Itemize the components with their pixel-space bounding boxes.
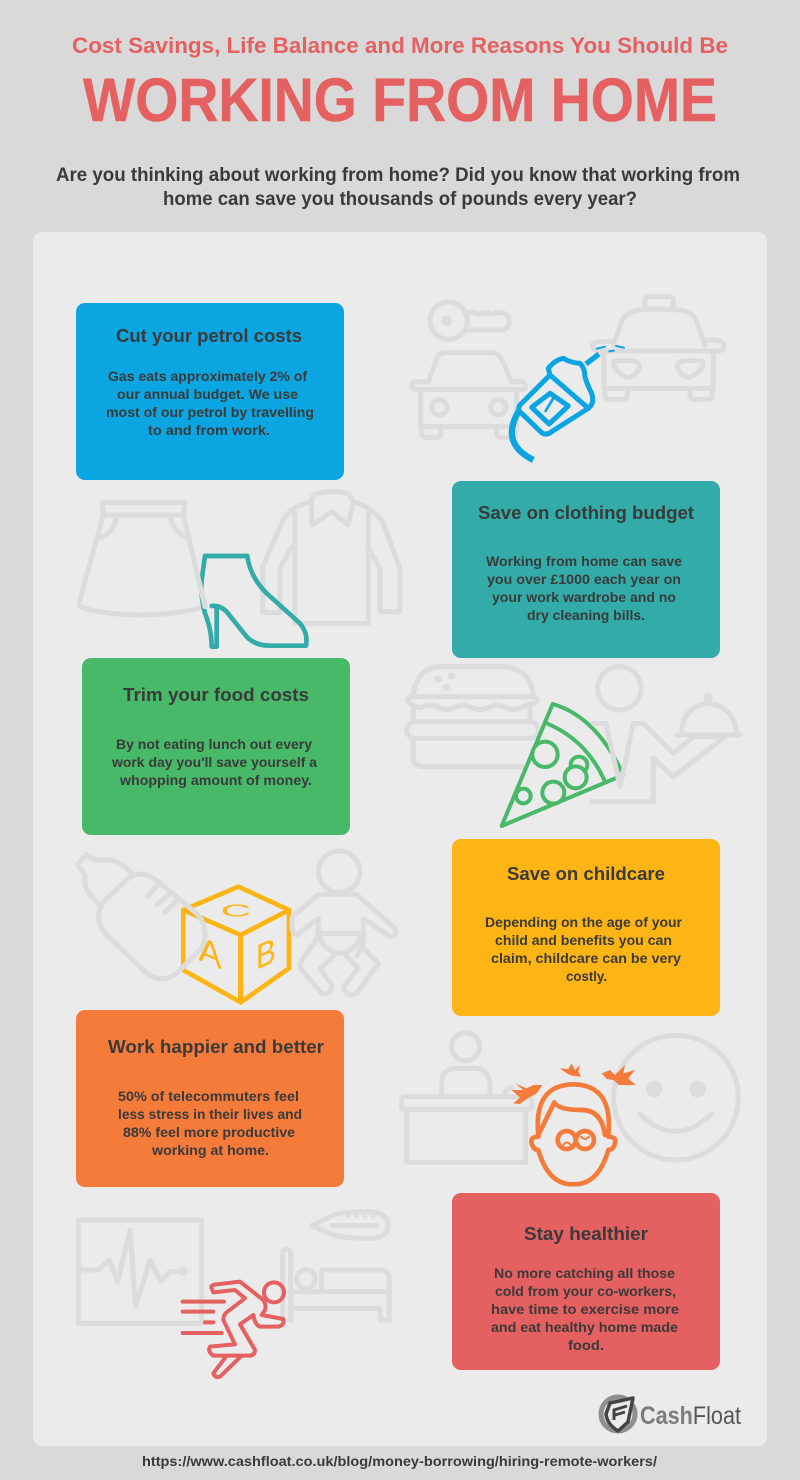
heading: petrol: Cut your petrol costs (116, 326, 302, 346)
text block: healthier: and eat healthy home made (491, 1320, 679, 1335)
text block: healthier: cold from your co-workers, (495, 1284, 676, 1299)
text block: childcare (485, 915, 683, 984)
text block: clothing: dry cleaning bills. (527, 608, 645, 623)
text block: petrol: our annual budget. We use (117, 387, 299, 402)
title: WORKING FROM HOME (83, 66, 717, 134)
text block: childcare: Depending on the age of your (485, 915, 683, 930)
text block: petrol: to and from work. (148, 423, 270, 438)
text block: healthier: food. (568, 1338, 604, 1353)
icon: monitor, thermometer, bed and runner (78, 1212, 389, 1377)
panel: food costs (82, 658, 350, 835)
text block: intro (56, 164, 740, 210)
panel: petrol costs (76, 303, 344, 480)
text block: healthier (491, 1266, 680, 1353)
icon: desk worker, smiley and dizzy head (402, 1033, 738, 1184)
heading: kicker: Cost Savings, Life Balance and More Reasons You Should Be (72, 33, 728, 58)
icon: skirt, shirt and boot (79, 492, 400, 647)
heading: healthier: Stay healthier (524, 1224, 648, 1244)
text block: happier: less stress in their lives and (118, 1107, 302, 1122)
text block: food: By not eating lunch out every (116, 737, 313, 752)
text: brand name: CashFloat (640, 1402, 741, 1430)
text block: petrol: most of our petrol by travelling (106, 405, 314, 420)
text block: petrol: Gas eats approximately 2% of (108, 369, 308, 384)
text block: healthier: have time to exercise more (491, 1302, 680, 1317)
text block: clothing: your work wardrobe and no (492, 590, 676, 605)
text block: clothing: you over £1000 each year on (487, 572, 681, 587)
footer: source URL: https://www.cashfloat.co.uk/blog/money-borrowing/hiring-remote-workers/ (142, 1453, 657, 1469)
text block: clothing (486, 554, 683, 623)
text block: intro: Are you thinking about working from home? Did you know that working from (56, 164, 740, 186)
text block: happier (118, 1089, 302, 1158)
text block: happier: 88% feel more productive (123, 1125, 296, 1140)
text block: food (111, 737, 318, 788)
text block: food: work day you'll save yourself a (111, 755, 318, 770)
heading: childcare: Save on childcare (507, 864, 665, 884)
panel: childcare (452, 839, 720, 1016)
text block: childcare: costly. (566, 969, 607, 984)
text block: petrol (106, 369, 314, 438)
panel: main background (33, 232, 767, 1446)
heading: food: Trim your food costs (123, 685, 309, 705)
icon: key, cars and fuel pump (412, 297, 724, 460)
panel: happier (76, 1010, 344, 1187)
panel: clothing budget (452, 481, 720, 658)
heading: clothing: Save on clothing budget (478, 503, 694, 523)
text block: intro: home can save you thousands of pounds every year? (163, 188, 637, 210)
icon: burger, waiter and pizza (407, 667, 740, 826)
heading: happier: Work happier and better (108, 1037, 324, 1057)
icon: bottle, toy block and baby (78, 851, 396, 1002)
text block: clothing: Working from home can save (486, 554, 683, 569)
text block: happier: 50% of telecommuters feel (118, 1089, 299, 1104)
icon: bottle, toy block and baby: B (256, 930, 276, 978)
text block: happier: working at home. (151, 1143, 269, 1158)
header: titles and intro (56, 33, 740, 210)
icon: logo mark (601, 1397, 635, 1431)
icon: bottle, toy block and baby: A (198, 928, 222, 977)
text block: childcare: claim, childcare can be very (491, 951, 682, 966)
icon: bottle, toy block and baby: C (221, 901, 251, 920)
text block: food: whopping amount of money. (119, 773, 312, 788)
text block: childcare: child and benefits you can (495, 933, 672, 948)
text block: healthier: No more catching all those (494, 1266, 676, 1281)
panel: healthier (452, 1193, 720, 1370)
logo: CashFloat (601, 1397, 741, 1431)
